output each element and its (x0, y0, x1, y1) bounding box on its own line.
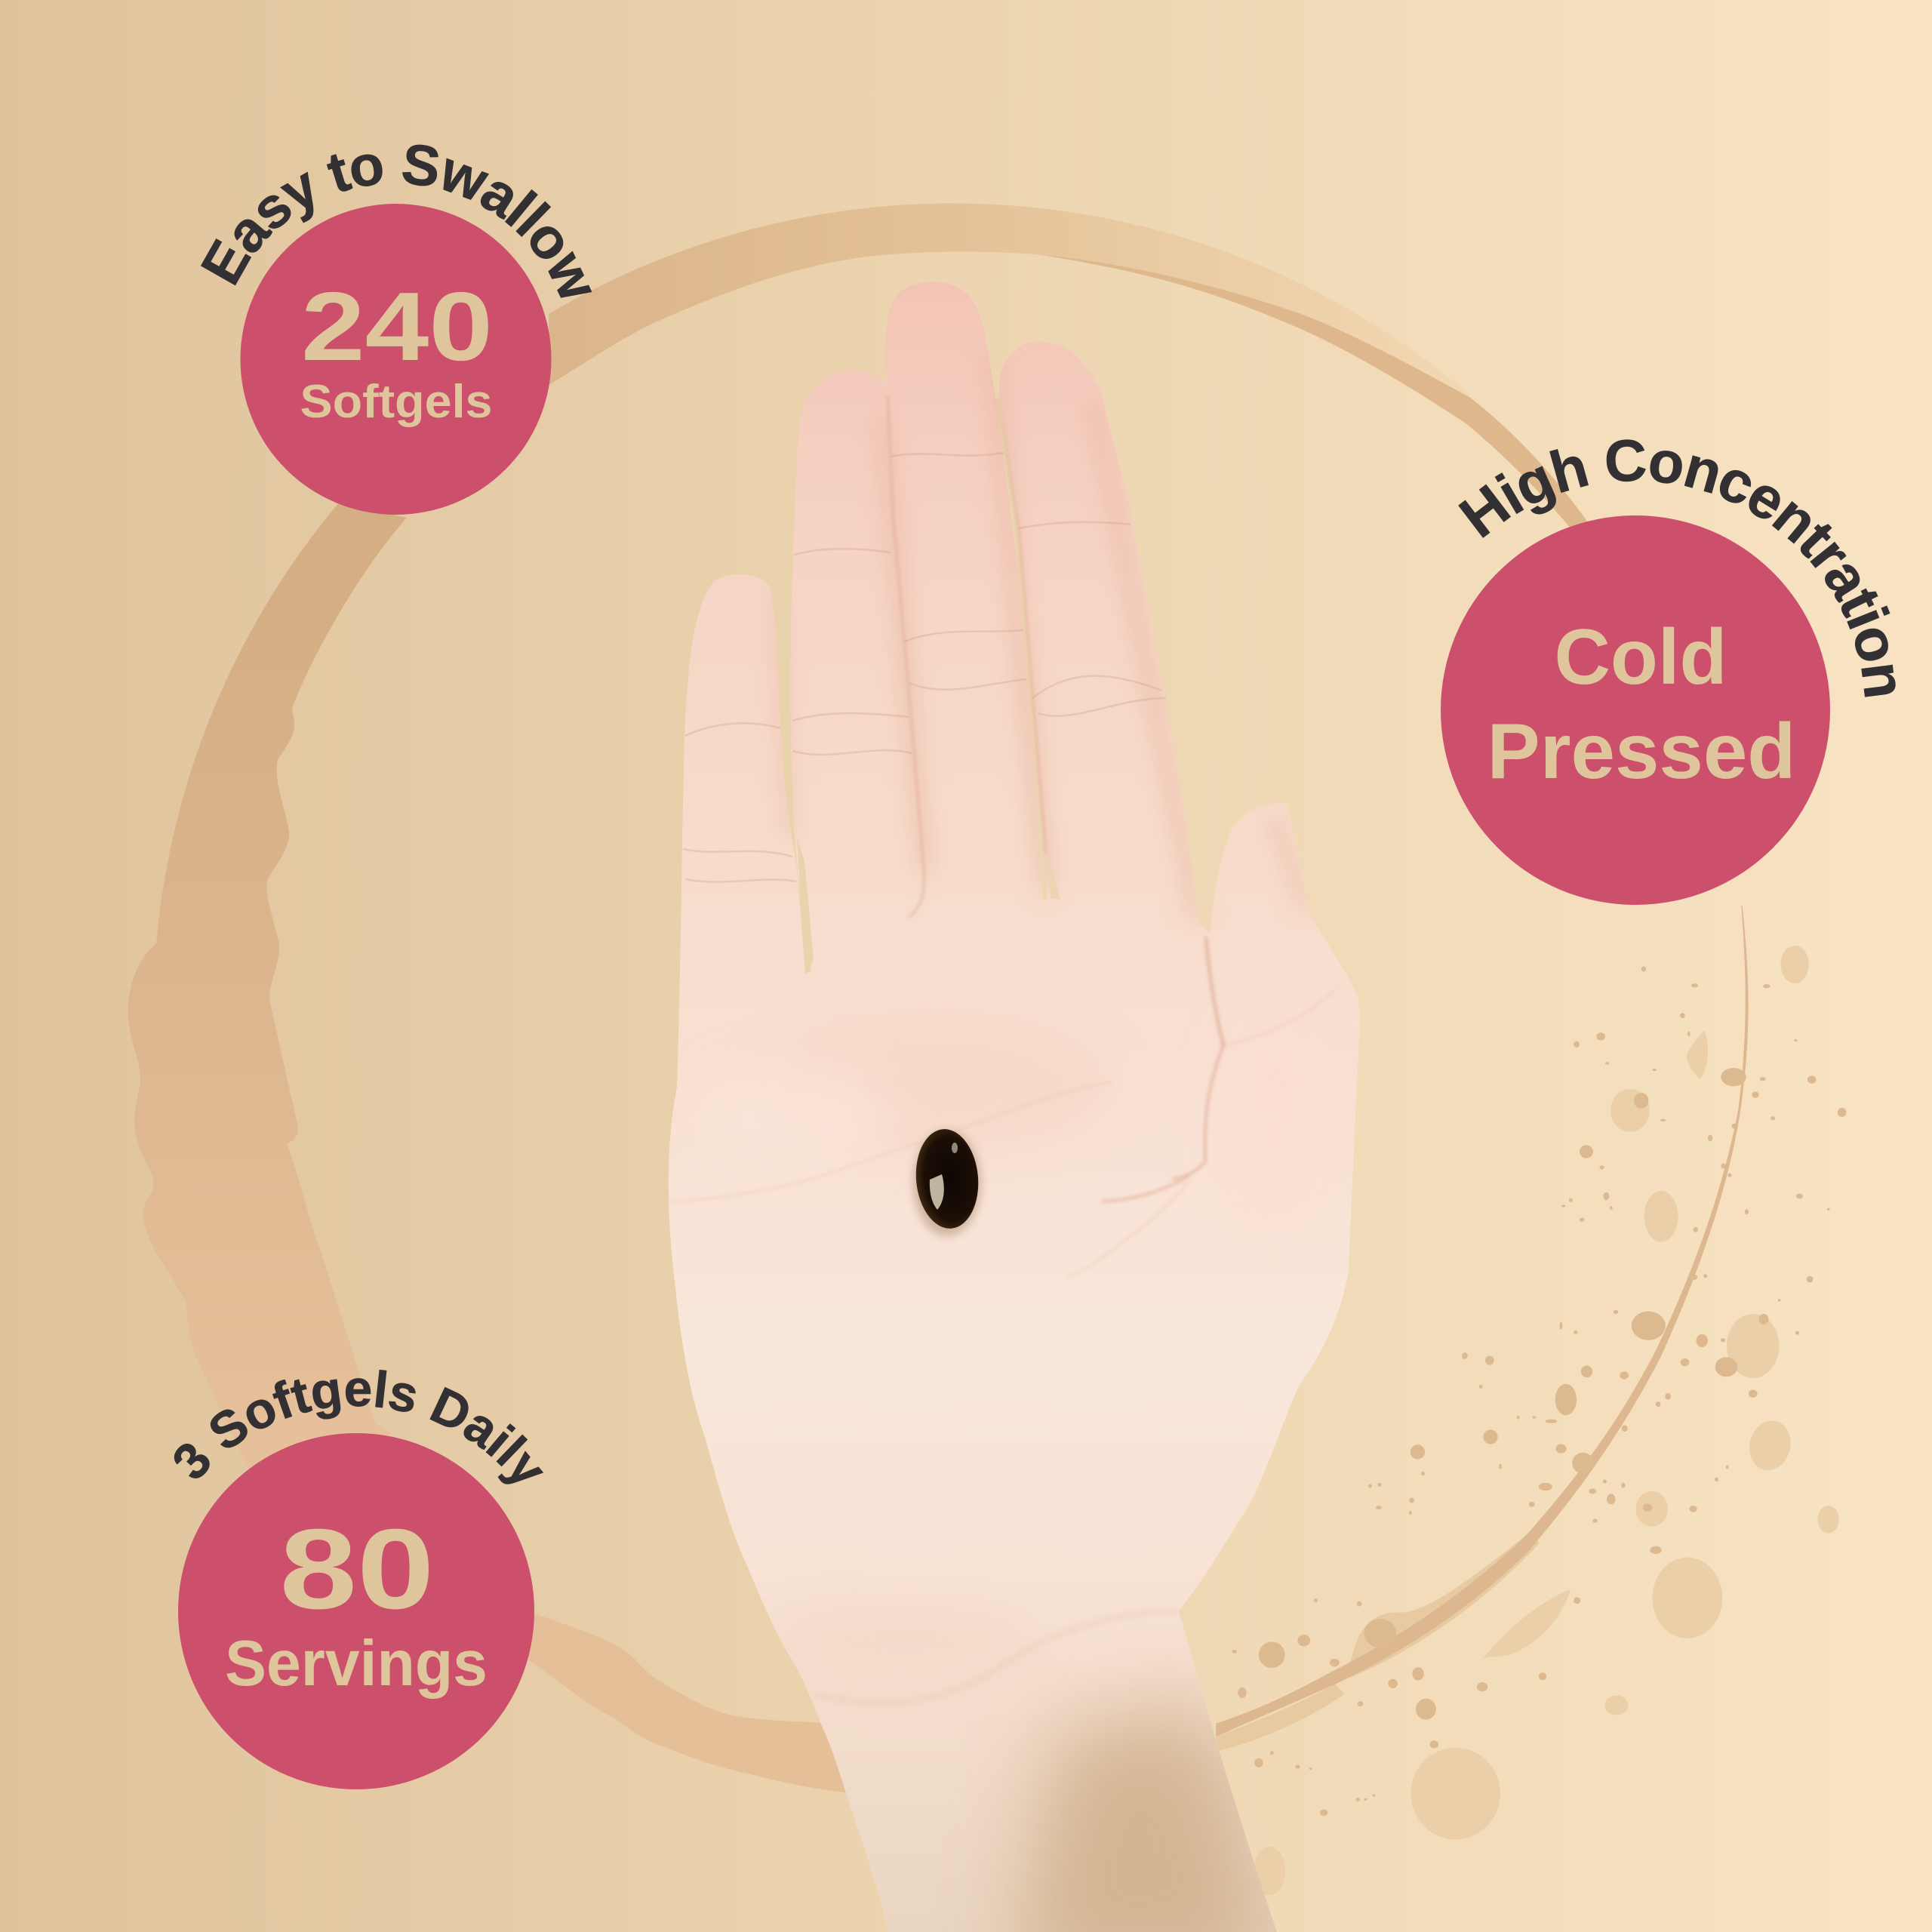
badge: 80 servings (178, 1433, 534, 1789)
hand silhouette: palm, thumb and fingers (669, 281, 1360, 1932)
stain ring (128, 203, 1749, 1795)
badge: 240 softgels: 240 (301, 272, 493, 381)
finger gaps (888, 396, 1223, 1179)
wrist crease (812, 1611, 1179, 1703)
badge: 80 servings: 80 (279, 1505, 435, 1632)
curved label: 3 softgels daily: 3 Softgels Daily (174, 1369, 543, 1484)
curved label: easy to swallow: Easy to Swallow (201, 145, 592, 298)
badge: 240 softgels (240, 204, 551, 515)
finger creases (683, 453, 1166, 882)
badge: cold pressed: Cold (1555, 614, 1727, 701)
badge: 240 softgels: Softgels (300, 376, 492, 428)
palm lines (669, 989, 1336, 1277)
hand (669, 281, 1360, 1932)
badge: cold pressed (1441, 515, 1830, 905)
soft skin shading (694, 362, 1328, 1932)
badge: cold pressed: Pressed (1487, 708, 1796, 795)
badge: 80 servings: Servings (225, 1628, 488, 1700)
curved label: high concentration: High Concentration (1458, 439, 1896, 697)
splatter: coffee stains (1232, 946, 1846, 1895)
softgel capsule (912, 1127, 983, 1236)
